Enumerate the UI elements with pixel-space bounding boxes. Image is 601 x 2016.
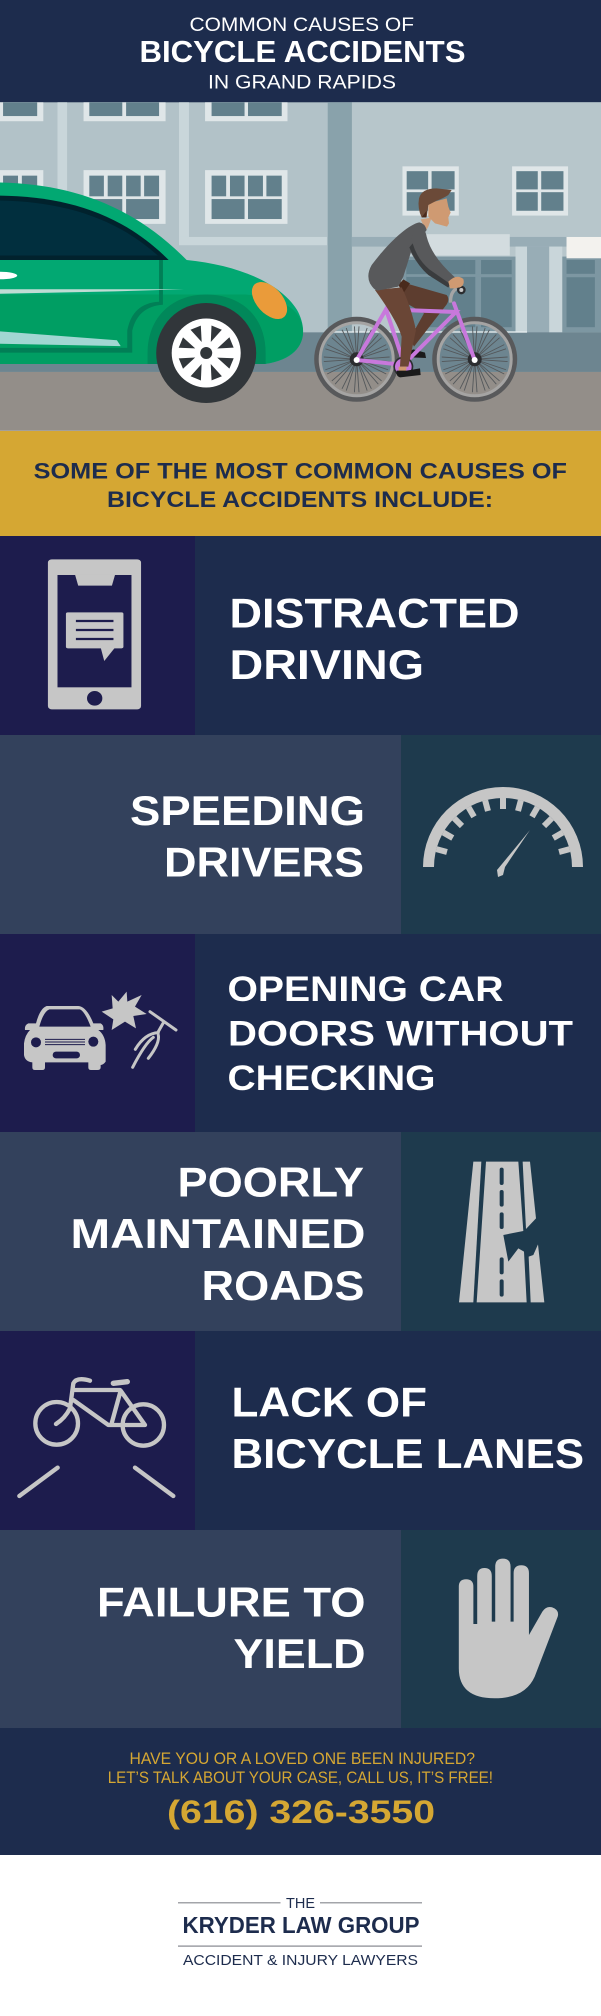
cyclist on bicycle — [317, 188, 515, 399]
panel: call to action footer — [0, 1728, 601, 1855]
panel: distracted driving — [0, 536, 601, 735]
title: bicycle accidents: BICYCLE ACCIDENTS — [140, 34, 466, 69]
panel: lack of bicycle lanes — [0, 1331, 601, 1530]
label: failure to yield: FAILURE TO — [97, 1579, 366, 1626]
label: failure to yield — [97, 1579, 366, 1677]
banner text: BICYCLE ACCIDENTS INCLUDE: — [107, 487, 493, 512]
heading: common causes of: COMMON CAUSES OF — [190, 14, 414, 36]
label: distracted driving — [230, 590, 520, 688]
illustration: street scene with car and cyclist — [0, 102, 601, 431]
logo: the kryder law group: ACCIDENT & INJURY LAWYERS — [183, 1953, 418, 1969]
label: lack of bicycle lanes — [232, 1379, 584, 1477]
car indicator lamp — [245, 275, 294, 326]
call to action text — [108, 1750, 493, 1787]
icon: smartphone with message — [48, 559, 141, 709]
label: distracted driving: DISTRACTED — [230, 590, 520, 637]
label: speeding drivers — [130, 787, 365, 886]
label: lack of bicycle lanes: LACK OF — [232, 1379, 427, 1426]
icon: raised hand — [459, 1559, 558, 1698]
logo: the kryder law group: THE — [286, 1896, 315, 1912]
label: opening car doors without checking: CHECKING — [228, 1059, 436, 1098]
label: opening car doors without checking — [228, 970, 573, 1098]
icon: speedometer — [423, 787, 583, 877]
label: failure to yield: YIELD — [234, 1630, 366, 1677]
panel: header — [0, 0, 601, 103]
logo: the kryder law group: KRYDER LAW GROUP — [182, 1912, 420, 1938]
label: poorly maintained roads: POORLY — [178, 1159, 364, 1206]
bike rear wheel — [317, 319, 397, 399]
call to action text: HAVE YOU OR A LOVED ONE BEEN INJURED? — [130, 1750, 475, 1768]
label: speeding drivers: DRIVERS — [164, 839, 364, 886]
car wheel — [156, 303, 256, 403]
call to action text: LET’S TALK ABOUT YOUR CASE, CALL US, IT’S FREE! — [108, 1769, 493, 1787]
panel: poorly maintained roads — [0, 1132, 601, 1331]
panel: failure to yield — [0, 1530, 601, 1728]
heading: in grand rapids: IN GRAND RAPIDS — [208, 72, 396, 94]
phone number: (616) 326-3550 — [167, 1794, 435, 1830]
label: poorly maintained roads: MAINTAINED — [70, 1210, 366, 1257]
label: lack of bicycle lanes: BICYCLE LANES — [232, 1430, 584, 1477]
icon: damaged road — [459, 1162, 544, 1302]
panel: gold intro banner — [0, 431, 601, 536]
icon: car door collision with bicycle — [24, 992, 176, 1070]
buildings background — [0, 102, 601, 431]
car — [0, 183, 303, 403]
logo: the kryder law group — [178, 1896, 422, 1969]
label: opening car doors without checking: DOORS WITHOUT — [228, 1015, 573, 1054]
label: speeding drivers: SPEEDING — [130, 787, 365, 834]
banner text — [34, 459, 567, 512]
label: distracted driving: DRIVING — [230, 641, 424, 688]
label: poorly maintained roads: ROADS — [202, 1262, 364, 1309]
bike front wheel — [435, 319, 515, 399]
panel: speeding drivers — [0, 735, 601, 934]
icon: bicycle with lane markings — [19, 1379, 173, 1496]
panel: opening car doors without checking — [0, 934, 601, 1132]
label: poorly maintained roads — [70, 1159, 366, 1309]
banner text: SOME OF THE MOST COMMON CAUSES OF — [34, 459, 567, 484]
label: opening car doors without checking: OPENING CAR — [228, 970, 504, 1009]
